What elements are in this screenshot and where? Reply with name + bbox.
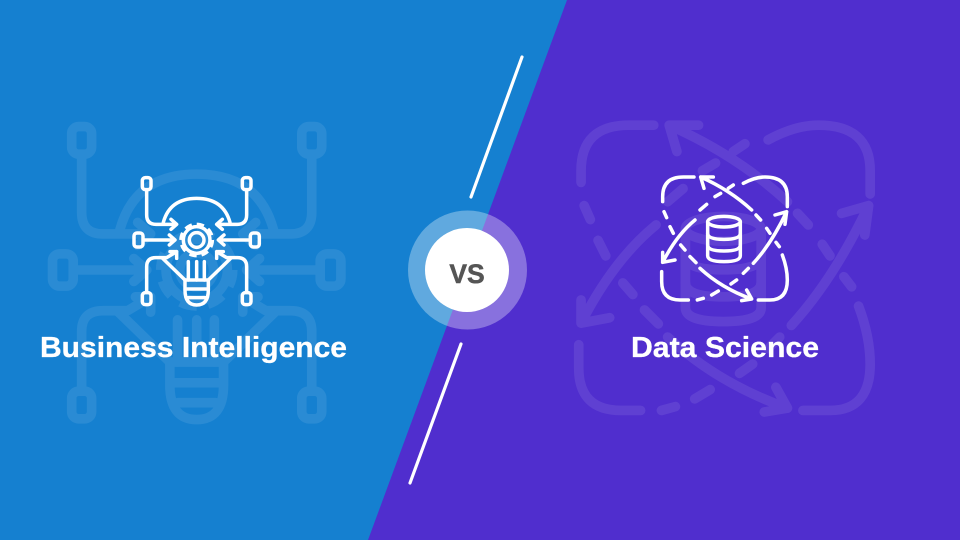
panel: Data Science background xyxy=(368,0,960,540)
heading: Data Science: Data Science xyxy=(631,332,819,364)
heading: Business Intelligence: Business Intelligence xyxy=(40,332,347,364)
badge: VS: VS xyxy=(449,259,485,289)
divider line: upper xyxy=(471,57,522,197)
icon: lightbulb with gear and arrows xyxy=(134,178,259,305)
icon: ghost data orbit watermark xyxy=(579,125,870,412)
icon: ghost lightbulb network watermark xyxy=(53,127,341,420)
icon: database with orbiting arrows xyxy=(662,177,787,301)
divider line: lower xyxy=(410,344,461,483)
badge: VS xyxy=(408,210,527,330)
